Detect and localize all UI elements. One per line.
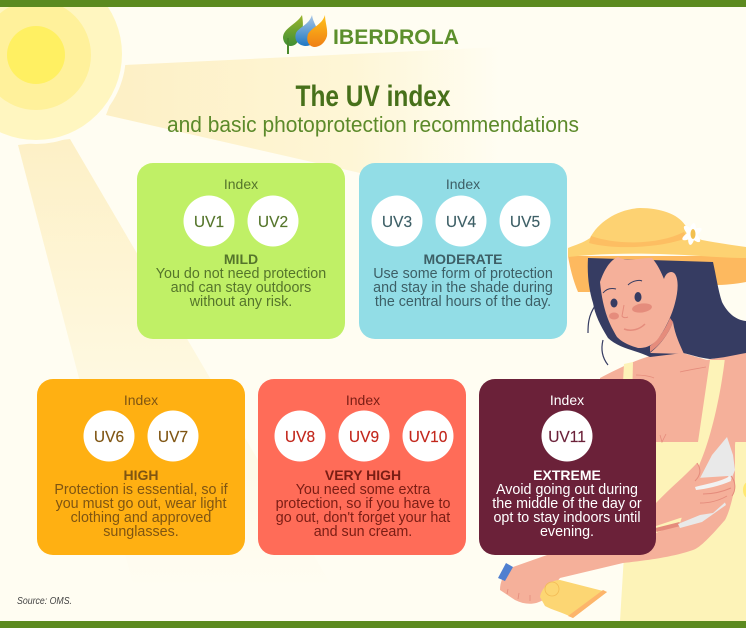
recommendation [373, 266, 553, 310]
index label: Index [550, 392, 584, 408]
level heading: EXTREME [533, 467, 601, 483]
arm crease [656, 524, 680, 530]
sun rays [18, 47, 500, 600]
icon: leaf [283, 15, 303, 46]
eyes [610, 292, 642, 308]
recommendation: without any risk. [189, 294, 292, 310]
logo wordmark: IBERDROLA [333, 26, 459, 49]
subtitle: and basic photoprotection recommendations [167, 112, 579, 137]
panel: mild [137, 163, 345, 339]
UV6 badge: UV6 [94, 429, 124, 446]
level heading: MODERATE [423, 251, 503, 267]
icon: water drop [295, 15, 318, 46]
source note: Source: OMS. [17, 596, 72, 607]
recommendation: You do not need protection [156, 266, 326, 282]
UV8 badge: UV8 [285, 429, 315, 446]
UV10 badge: UV10 [409, 429, 448, 446]
recommendation: go out, don't forget your hat [276, 510, 450, 526]
face [600, 257, 678, 348]
recommendation [54, 482, 228, 540]
recommendation: and stay in the shade during [373, 280, 553, 296]
hat flower [681, 223, 703, 245]
UV2 badge [248, 196, 298, 246]
UV6 badge [84, 410, 134, 462]
index label: Index [224, 176, 258, 192]
sunscreen cap [498, 563, 513, 581]
recommendation [276, 482, 450, 540]
raised arm and forearm [500, 352, 746, 604]
recommendation: opt to stay indoors until [493, 510, 641, 526]
hat band [589, 232, 687, 247]
dress left strap [622, 362, 633, 400]
UV11 badge [542, 410, 592, 462]
recommendation [156, 266, 326, 310]
sun icon on bottle [545, 582, 559, 596]
collarbone lines [636, 367, 706, 442]
recommendation: and can stay outdoors [171, 280, 311, 296]
UV1 badge [184, 196, 234, 246]
hair [588, 258, 746, 359]
recommendation: You need some extra [296, 482, 430, 498]
UV5 badge: UV5 [510, 214, 540, 231]
title: The UV index [296, 80, 451, 113]
UV3 badge: UV3 [382, 214, 412, 231]
level heading: MILD [224, 251, 258, 267]
neck [650, 322, 684, 354]
recommendation: sunglasses. [103, 524, 179, 540]
UV7 badge: UV7 [158, 429, 188, 446]
eyebrows and smile [603, 280, 645, 330]
finger lines on bottle hand [507, 589, 530, 601]
panel: extreme [479, 379, 656, 555]
level heading: VERY HIGH [325, 467, 401, 483]
UV9 badge [338, 410, 390, 462]
recommendation: you must go out, wear light [56, 496, 226, 512]
bottle edge [568, 590, 607, 618]
recommendation: the middle of the day or [492, 496, 642, 512]
UV4 badge [436, 196, 486, 246]
recommendation: evening. [540, 524, 594, 540]
UV4 badge: UV4 [446, 214, 476, 231]
UV2 badge: UV2 [258, 214, 288, 231]
yellow accent at edge [743, 482, 746, 498]
panel: moderate [359, 163, 567, 339]
hat crown and brim [568, 208, 746, 258]
woman illustration [498, 208, 746, 621]
index label: Index [446, 176, 480, 192]
torso skin [600, 352, 746, 442]
top bar [0, 0, 746, 7]
UV11 badge: UV11 [548, 429, 586, 446]
icon: leaf stem [287, 38, 289, 54]
neck shadow [650, 318, 673, 352]
finger lines [695, 463, 735, 503]
index label: Index [346, 392, 380, 408]
UV7 badge [148, 410, 198, 462]
UV10 badge [402, 410, 454, 462]
hat under-brim [568, 256, 746, 292]
panel: high [37, 379, 245, 555]
recommendation: protection, so if you have to [276, 496, 450, 512]
hand applying cream [656, 463, 735, 526]
recommendation: Use some form of protection [373, 266, 553, 282]
level heading: HIGH [124, 467, 158, 483]
recommendation: the central hours of the day. [375, 294, 551, 310]
sun [0, 0, 126, 144]
bottom bar [0, 621, 746, 628]
UV3 badge [372, 196, 422, 246]
recommendation: and sun cream. [314, 524, 412, 540]
recommendation [492, 482, 642, 540]
blush [609, 302, 653, 320]
UV5 badge [500, 196, 550, 246]
panel: very high [258, 379, 466, 555]
icon: flame [307, 15, 327, 47]
logo: Iberdrola [283, 15, 459, 54]
index label: Index [124, 392, 158, 408]
UV9 badge: UV9 [349, 429, 379, 446]
recommendation: Avoid going out during [496, 482, 638, 498]
UV1 badge: UV1 [194, 214, 224, 231]
dress [620, 360, 746, 621]
recommendation: Protection is essential, so if [54, 482, 228, 498]
recommendation: clothing and approved [71, 510, 211, 526]
sunscreen bottle [540, 580, 607, 618]
loose hair strands [588, 306, 608, 365]
cream stripe on fingers [695, 476, 731, 490]
sun cream [678, 437, 735, 528]
UV8 badge [274, 410, 326, 462]
